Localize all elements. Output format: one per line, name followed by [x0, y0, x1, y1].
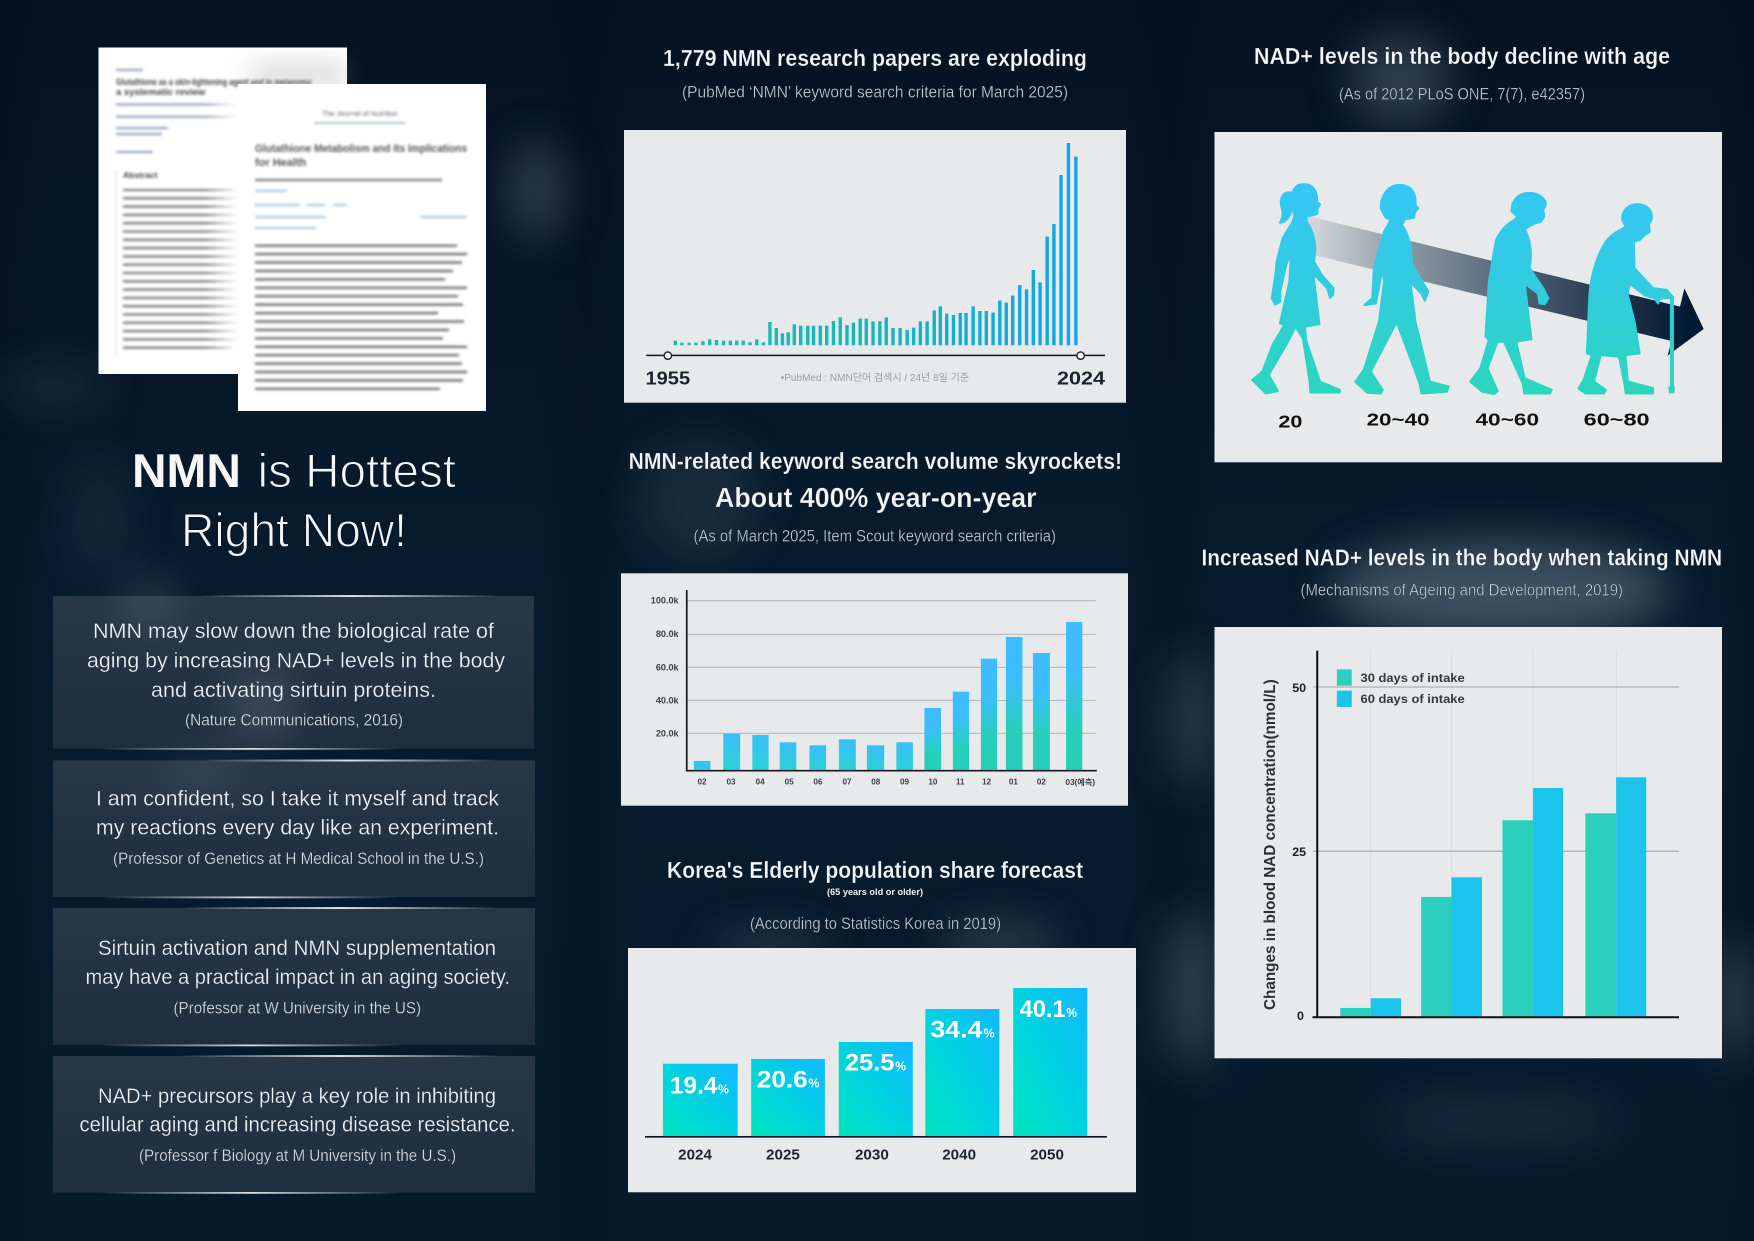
- panel: elderly population bar chart: 2050: [1030, 1146, 1064, 1163]
- panel: quote 3: (Professor at W University in the US): [174, 999, 421, 1017]
- panel: elderly population bar chart: 34.4: [930, 1017, 983, 1044]
- panel: elderly population bar chart: 20.6: [757, 1066, 808, 1093]
- panel: keyword search bar chart: 100.0k: [651, 596, 680, 606]
- heading: elderly population: (65 years old or older): [827, 887, 923, 897]
- panel: elderly population bar chart: %: [808, 1075, 820, 1090]
- panel: NAD increase bar chart: Changes in blood NAD concentration(nmol/L): [1262, 679, 1279, 1010]
- panel: elderly population bar chart: 25.5: [845, 1050, 895, 1077]
- panel: keyword search bar chart: 20.0k: [656, 728, 680, 738]
- heading: NAD decline: (As of 2012 PLoS ONE, 7(7), e42357): [1339, 85, 1585, 103]
- paper: back document: a systematic review: [116, 87, 206, 98]
- panel: quote 3: Sirtuin activation and NMN supplementation: [98, 936, 496, 960]
- heading: research papers: [663, 45, 1087, 102]
- paper: back document: Abstract: [123, 170, 158, 180]
- panel: NAD increase bar chart: 0: [1297, 1009, 1304, 1023]
- panel: keyword search bar chart: 06: [813, 778, 823, 787]
- panel: NAD increase bar chart: 25: [1292, 845, 1306, 859]
- heading: elderly population: [667, 857, 1083, 933]
- panel: keyword search bar chart: 02: [697, 778, 707, 787]
- panel: keyword search bar chart: [621, 573, 1128, 806]
- panel: quote 4: (Professor f Biology at M University in the U.S.): [139, 1147, 456, 1165]
- heading: keyword search volume: [629, 448, 1122, 546]
- panel: research papers bar chart: •PubMed : NMN단어 검색시 / 24년 8일 기준: [781, 371, 969, 384]
- panel: NAD decline with age: 60~80: [1584, 410, 1650, 430]
- panel: keyword search bar chart: 05: [785, 778, 794, 787]
- panel: keyword search bar chart: 10: [928, 778, 938, 787]
- paper: front document: The Journal of Nutrition: [322, 111, 398, 118]
- panel: quote 3: may have a practical impact in an aging society.: [86, 965, 510, 989]
- paper: front document: Glutathione Metabolism and Its Implications: [255, 143, 467, 155]
- heading: NAD increase: (Mechanisms of Ageing and Development, 2019): [1300, 582, 1623, 600]
- panel: elderly population bar chart: 2025: [766, 1146, 800, 1163]
- paper: back document: Glutathione as a skin-lightening agent and in melanoma:: [116, 77, 313, 88]
- panel: keyword search bar chart: 04: [756, 778, 765, 787]
- panel: keyword search bar chart: 12: [982, 778, 992, 787]
- panel: quote 1: NMN may slow down the biological rate of: [93, 619, 494, 643]
- panel: elderly population bar chart: %: [983, 1026, 995, 1041]
- panel: elderly population bar chart: 40.1: [1020, 996, 1066, 1023]
- panel: keyword search bar chart: 08: [871, 778, 881, 787]
- panel: keyword search bar chart: 11: [956, 778, 965, 787]
- panel: quote 1: and activating sirtuin proteins.: [151, 678, 436, 702]
- panel: keyword search bar chart: 02: [1037, 778, 1046, 787]
- panel: quote 4: [53, 1055, 535, 1194]
- paper: front document: for Health: [255, 157, 307, 169]
- paper: back document: [98, 48, 347, 374]
- panel: elderly population bar chart: %: [1066, 1005, 1077, 1020]
- heading: keyword search volume: About 400% year-on-year: [715, 482, 1037, 513]
- title: Right Now!: [181, 504, 407, 556]
- heading: elderly population: (According to Statistics Korea in 2019): [750, 915, 1001, 933]
- panel: keyword search bar chart: 80.0k: [656, 629, 680, 639]
- panel: research papers bar chart: [624, 130, 1126, 403]
- heading: research papers: 1,779 NMN research papers are exploding: [663, 45, 1087, 71]
- panel: keyword search bar chart: 03: [727, 778, 736, 787]
- heading: keyword search volume: (As of March 2025, Item Scout keyword search criteria): [694, 528, 1056, 546]
- panel: elderly population bar chart: [628, 948, 1136, 1192]
- panel: quote 2: (Professor of Genetics at H Medical School in the U.S.): [113, 850, 484, 868]
- panel: quote 2: I am confident, so I take it myself and track: [96, 786, 499, 810]
- panel: elderly population bar chart: 2030: [855, 1146, 889, 1163]
- panel: keyword search bar chart: 01: [1009, 778, 1018, 787]
- panel: quote 2: [53, 755, 535, 898]
- panel: NAD increase bar chart: [1214, 627, 1722, 1058]
- heading: NAD increase: [1202, 545, 1722, 600]
- panel: elderly population bar chart: %: [895, 1059, 906, 1074]
- panel: keyword search bar chart: 60.0k: [656, 662, 680, 672]
- title: NMN: [132, 444, 241, 497]
- panel: research papers bar chart: 1955: [646, 367, 690, 388]
- panel: NAD decline with age: [1214, 132, 1722, 462]
- panel: quote 4: NAD+ precursors play a key role in inhibiting: [98, 1084, 496, 1108]
- panel: NAD increase bar chart: 30 days of intake: [1361, 671, 1465, 685]
- panel: NAD increase bar chart: 50: [1292, 681, 1306, 695]
- panel: keyword search bar chart: 40.0k: [656, 695, 680, 705]
- panel: keyword search bar chart: 09: [900, 778, 910, 787]
- panel: NAD decline with age: 20: [1278, 412, 1302, 432]
- panel: NAD increase bar chart: 60 days of intake: [1361, 692, 1465, 706]
- panel: NAD decline with age: 40~60: [1475, 410, 1539, 430]
- heading: NAD decline: NAD+ levels in the body decline with age: [1254, 43, 1670, 69]
- panel: quote 1: aging by increasing NAD+ levels in the body: [87, 648, 505, 672]
- heading: keyword search volume: NMN-related keyword search volume skyrockets!: [629, 448, 1122, 474]
- panel: quote 2: my reactions every day like an experiment.: [96, 816, 499, 840]
- panel: keyword search bar chart: 03(예측): [1065, 777, 1095, 787]
- heading: elderly population: Korea's Elderly population share forecast: [667, 857, 1083, 883]
- panel: quote 3: [53, 907, 535, 1046]
- panel: elderly population bar chart: 2024: [678, 1146, 713, 1163]
- paper: front document: [238, 84, 486, 411]
- panel: quote 1: [53, 571, 534, 750]
- panel: keyword search bar chart: 07: [842, 778, 852, 787]
- panel: elderly population bar chart: 19.4: [670, 1072, 718, 1099]
- panel: quote 1: (Nature Communications, 2016): [185, 712, 403, 730]
- heading: research papers: (PubMed ‘NMN’ keyword search criteria for March 2025): [682, 84, 1068, 102]
- panel: elderly population bar chart: 2040: [942, 1146, 976, 1163]
- title: is Hottest: [258, 444, 456, 497]
- title: [132, 444, 456, 556]
- heading: NAD decline: [1254, 43, 1670, 103]
- panel: elderly population bar chart: %: [718, 1081, 729, 1096]
- panel: NAD decline with age: 20~40: [1367, 410, 1429, 430]
- panel: quote 4: cellular aging and increasing disease resistance.: [80, 1112, 516, 1136]
- panel: research papers bar chart: 2024: [1057, 367, 1106, 388]
